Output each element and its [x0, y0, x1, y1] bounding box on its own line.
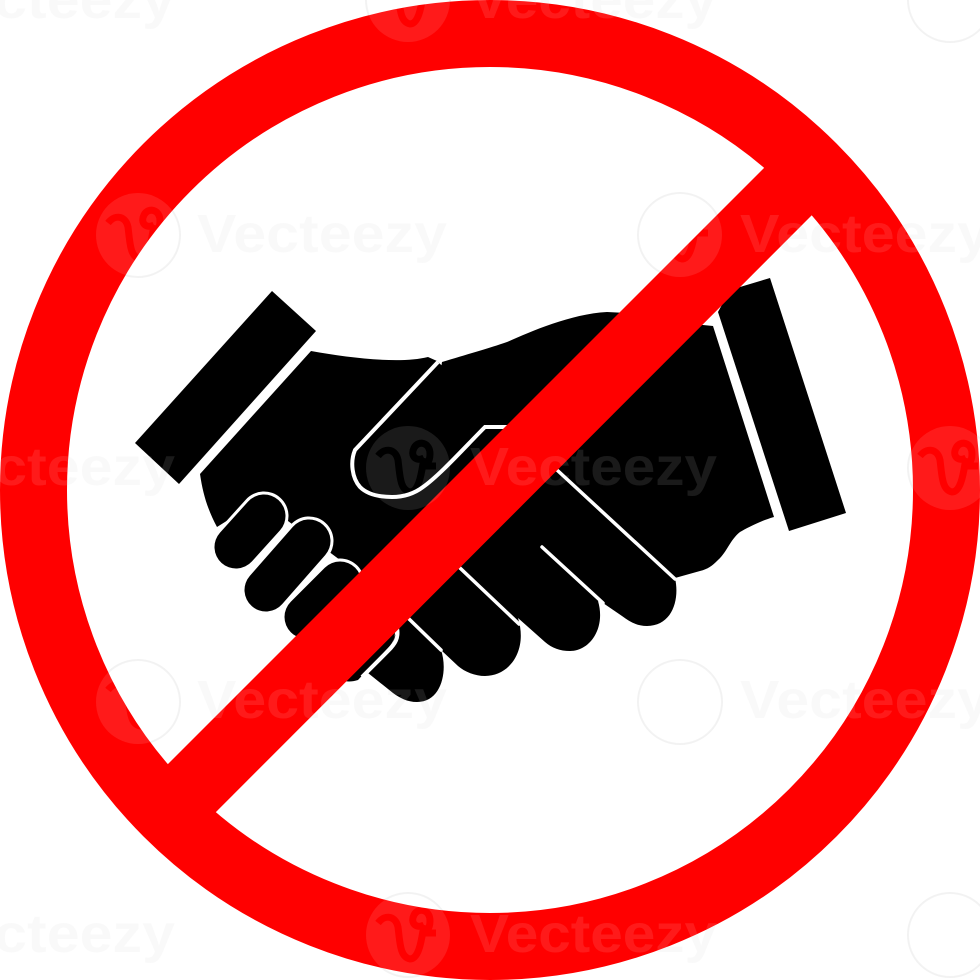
left hand finger 4 outline — [362, 628, 398, 677]
icon: handshake — [135, 278, 846, 702]
watermark: underlay on white: Vecteezy — [740, 204, 980, 264]
watermark: underlay on white: Vecteezy — [197, 670, 447, 730]
watermark: light overlay: Vecteezy — [197, 204, 447, 264]
thumb outline — [352, 362, 507, 497]
right hand with fingers — [368, 312, 774, 702]
watermark: underlay on white: Vecteezy — [740, 670, 980, 730]
watermark: underlay on white: Vecteezy — [197, 204, 447, 264]
right cuff — [718, 278, 846, 531]
watermark: light overlay: Vecteezy — [740, 204, 980, 264]
watermark: light overlay: Vecteezy — [197, 670, 447, 730]
left hand finger 2 — [266, 541, 309, 590]
watermark: light overlay: Vecteezy — [470, 437, 717, 497]
finger dividers — [407, 470, 675, 650]
left hand finger 3 — [306, 583, 340, 617]
watermark: light overlay: Vecteezy — [470, 904, 717, 964]
watermark: light overlay: Vecteezy — [740, 670, 980, 730]
left hand finger 4 — [340, 620, 395, 682]
watermark: underlay on white: Vecteezy — [470, 904, 717, 964]
left hand finger 1 — [236, 516, 264, 547]
left hand palm — [200, 351, 470, 650]
red diagonal bar — [148, 147, 832, 832]
left cuff — [135, 291, 316, 484]
